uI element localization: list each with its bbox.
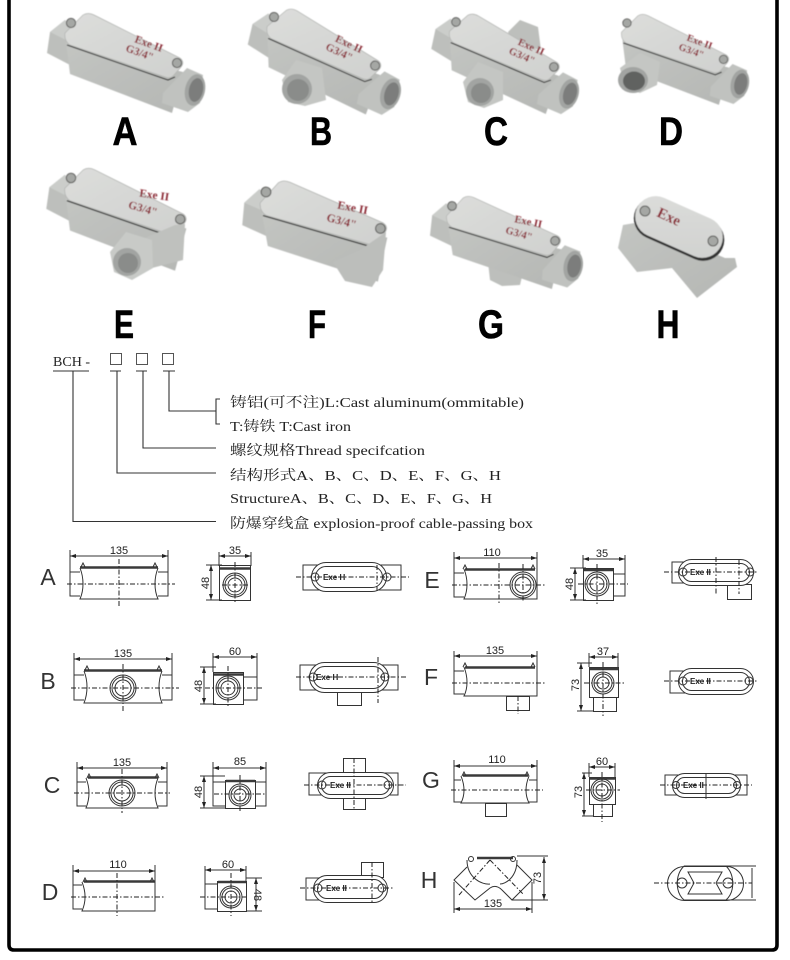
top view A: Exe H <box>323 573 345 582</box>
legend line: product name: 防爆穿线盒 explosion-proof cable-passing box <box>230 515 533 532</box>
legend line: structure cn: 结构形式A、B、C、D、E、F、G、H <box>230 467 501 484</box>
side view B <box>71 648 179 711</box>
code boxes <box>110 354 174 364</box>
photo B <box>243 6 410 118</box>
drawing set B: B <box>40 668 56 694</box>
front view B: 48 <box>193 680 205 692</box>
drawing set E <box>424 547 758 604</box>
front view G <box>573 756 620 822</box>
drawing set E: E <box>424 567 440 593</box>
drawing set A: A <box>40 564 56 590</box>
top view G: Exe II <box>683 781 704 790</box>
photo E: Exe II <box>139 188 170 204</box>
front view B <box>193 646 262 708</box>
front view A: 48 <box>200 577 212 589</box>
photo D <box>618 14 752 105</box>
front view C: 85 <box>234 756 246 768</box>
model code legend <box>53 354 533 532</box>
top view B <box>296 657 407 706</box>
side view C <box>74 757 170 813</box>
front view E: 48 <box>564 578 576 590</box>
legend line: cast iron: T:铸铁 T:Cast iron <box>230 418 351 435</box>
photo B: Exe II <box>333 33 364 56</box>
front view E <box>564 548 628 604</box>
drawing set C: C <box>44 772 60 798</box>
side view D <box>71 859 165 916</box>
top view H <box>654 866 756 900</box>
photo D: Exe II <box>685 33 714 52</box>
top view C <box>304 758 406 810</box>
front view C: 48 <box>193 786 205 798</box>
label G: G <box>478 303 504 347</box>
front view A <box>200 545 251 603</box>
side view E: 110 <box>483 547 501 559</box>
photo B: G3/4" <box>324 41 354 64</box>
side view H: 73 <box>532 872 544 884</box>
front view G: 73 <box>573 786 585 798</box>
side view D: 110 <box>109 859 127 871</box>
top view A <box>296 562 409 592</box>
photo D: G3/4" <box>677 42 705 61</box>
front view F: 37 <box>597 646 609 658</box>
side view H <box>454 856 548 913</box>
label B: B <box>310 110 332 154</box>
photo H: Exe <box>654 205 683 230</box>
top view D: Exe II <box>326 884 347 893</box>
label A: A <box>112 110 138 154</box>
front view F: 73 <box>570 679 582 691</box>
photo G: Exe II <box>513 214 543 231</box>
side view G <box>451 754 543 816</box>
top view E: Exe II <box>690 568 711 577</box>
side view C: 135 <box>113 757 131 769</box>
side view F: 135 <box>486 645 504 657</box>
photo C: G3/4" <box>507 46 536 67</box>
drawing set C <box>44 756 406 813</box>
front view B: 60 <box>229 646 241 658</box>
model prefix: BCH - <box>53 355 90 370</box>
label D: D <box>659 110 683 154</box>
drawing set D: D <box>42 879 58 905</box>
top view F: Exe II <box>690 677 711 686</box>
label F: F <box>308 303 326 347</box>
side view B: 135 <box>114 648 132 660</box>
legend line: material: 铸铝(可不注)L:Cast aluminum(ommitable) <box>230 394 524 411</box>
photo E: G3/4" <box>127 199 159 219</box>
top view G <box>660 773 752 799</box>
photo A: Exe II <box>133 34 164 55</box>
top view D <box>300 862 394 904</box>
drawing set H: H <box>421 867 437 893</box>
photo A <box>47 14 208 113</box>
photo F: G3/4" <box>325 211 358 231</box>
side view A <box>67 545 175 606</box>
photo E <box>46 168 186 280</box>
front view A: 35 <box>229 545 241 557</box>
side view G: 110 <box>488 754 506 766</box>
photo F <box>240 176 390 289</box>
drawing set F: F <box>424 664 438 690</box>
legend line: structure en: StructureA、B、C、D、E、F、G、H <box>230 492 492 507</box>
top view E <box>664 557 758 600</box>
label E: E <box>114 303 134 347</box>
legend line: thread: 螺纹规格Thread specifcation <box>230 442 425 459</box>
side view F <box>452 645 546 714</box>
photo C <box>427 11 587 116</box>
front view D: 60 <box>222 859 234 871</box>
top view C: Exe II <box>330 781 351 790</box>
drawing set D <box>42 859 394 916</box>
drawing set G: G <box>422 767 440 793</box>
side view A: 135 <box>110 545 128 557</box>
drawing set A <box>40 545 409 606</box>
front view G: 60 <box>596 756 608 768</box>
front view D: 48 <box>251 889 263 901</box>
photo G <box>429 192 587 293</box>
front view F <box>570 646 624 716</box>
photo A: G3/4" <box>124 43 155 64</box>
label H: H <box>656 303 680 347</box>
photo G: G3/4" <box>504 225 533 243</box>
front view C <box>193 756 266 811</box>
top view F <box>664 668 758 694</box>
label C: C <box>484 110 508 154</box>
photo H <box>618 190 737 298</box>
side view H: 135 <box>484 898 502 910</box>
drawing set B <box>40 646 407 711</box>
drawing set H <box>421 856 756 913</box>
top view B: Exe H <box>316 673 338 682</box>
photo C: Exe II <box>516 37 546 58</box>
drawing set F <box>424 645 758 716</box>
front view D <box>200 859 263 916</box>
drawing set G <box>422 754 752 822</box>
front view E: 35 <box>596 548 608 560</box>
side view E <box>452 547 546 603</box>
leader lines <box>53 371 220 522</box>
photo F: Exe II <box>336 199 369 217</box>
